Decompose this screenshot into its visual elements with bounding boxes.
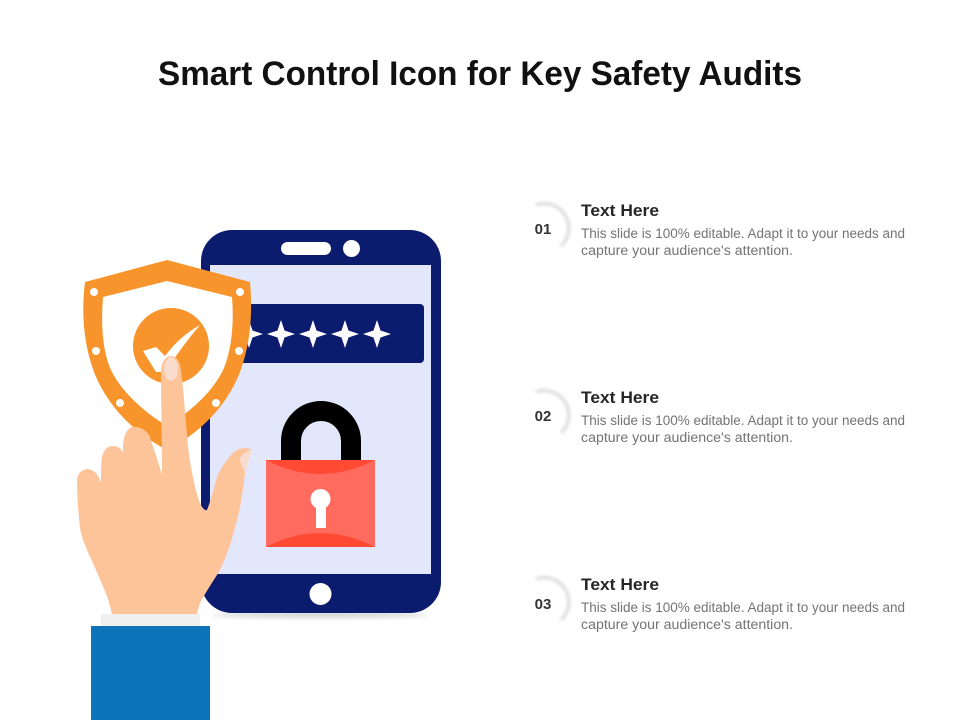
badge 03: 03 [535, 596, 551, 613]
body 02: capture your audience's attention. [581, 430, 793, 445]
heading 03: Text Here [581, 575, 659, 594]
body 03 [581, 600, 905, 632]
phone [201, 230, 441, 613]
icon: shield [83, 260, 251, 450]
icon: padlock [266, 411, 375, 547]
body 01: capture your audience's attention. [581, 243, 793, 258]
jacket sleeve [91, 626, 210, 720]
fingernail: thumb [240, 450, 252, 472]
badge 02: 02 [535, 408, 551, 425]
list item 03 [535, 575, 905, 632]
body 03: capture your audience's attention. [581, 617, 793, 632]
heading 01: Text Here [581, 201, 659, 220]
list item 01 [535, 201, 905, 258]
body 01: This slide is 100% editable. Adapt it to your needs and [581, 226, 905, 241]
badge 02 [535, 391, 569, 433]
fingernail: index [164, 357, 178, 381]
illustration: smart control [77, 230, 441, 720]
badge 01 [535, 204, 569, 246]
icon: pointing hand [77, 356, 252, 614]
heading 02: Text Here [581, 388, 659, 407]
phone shadow [212, 612, 428, 618]
password field [225, 304, 424, 363]
body 02 [581, 413, 905, 445]
shirt cuff [101, 614, 200, 626]
list item 02 [535, 388, 905, 445]
body 03: This slide is 100% editable. Adapt it to your needs and [581, 600, 905, 615]
badge 01: 01 [535, 221, 551, 238]
body 01 [581, 226, 905, 258]
badge 03 [535, 578, 569, 620]
body 02: This slide is 100% editable. Adapt it to your needs and [581, 413, 905, 428]
title: Smart Control Icon for Key Safety Audits [158, 55, 802, 93]
